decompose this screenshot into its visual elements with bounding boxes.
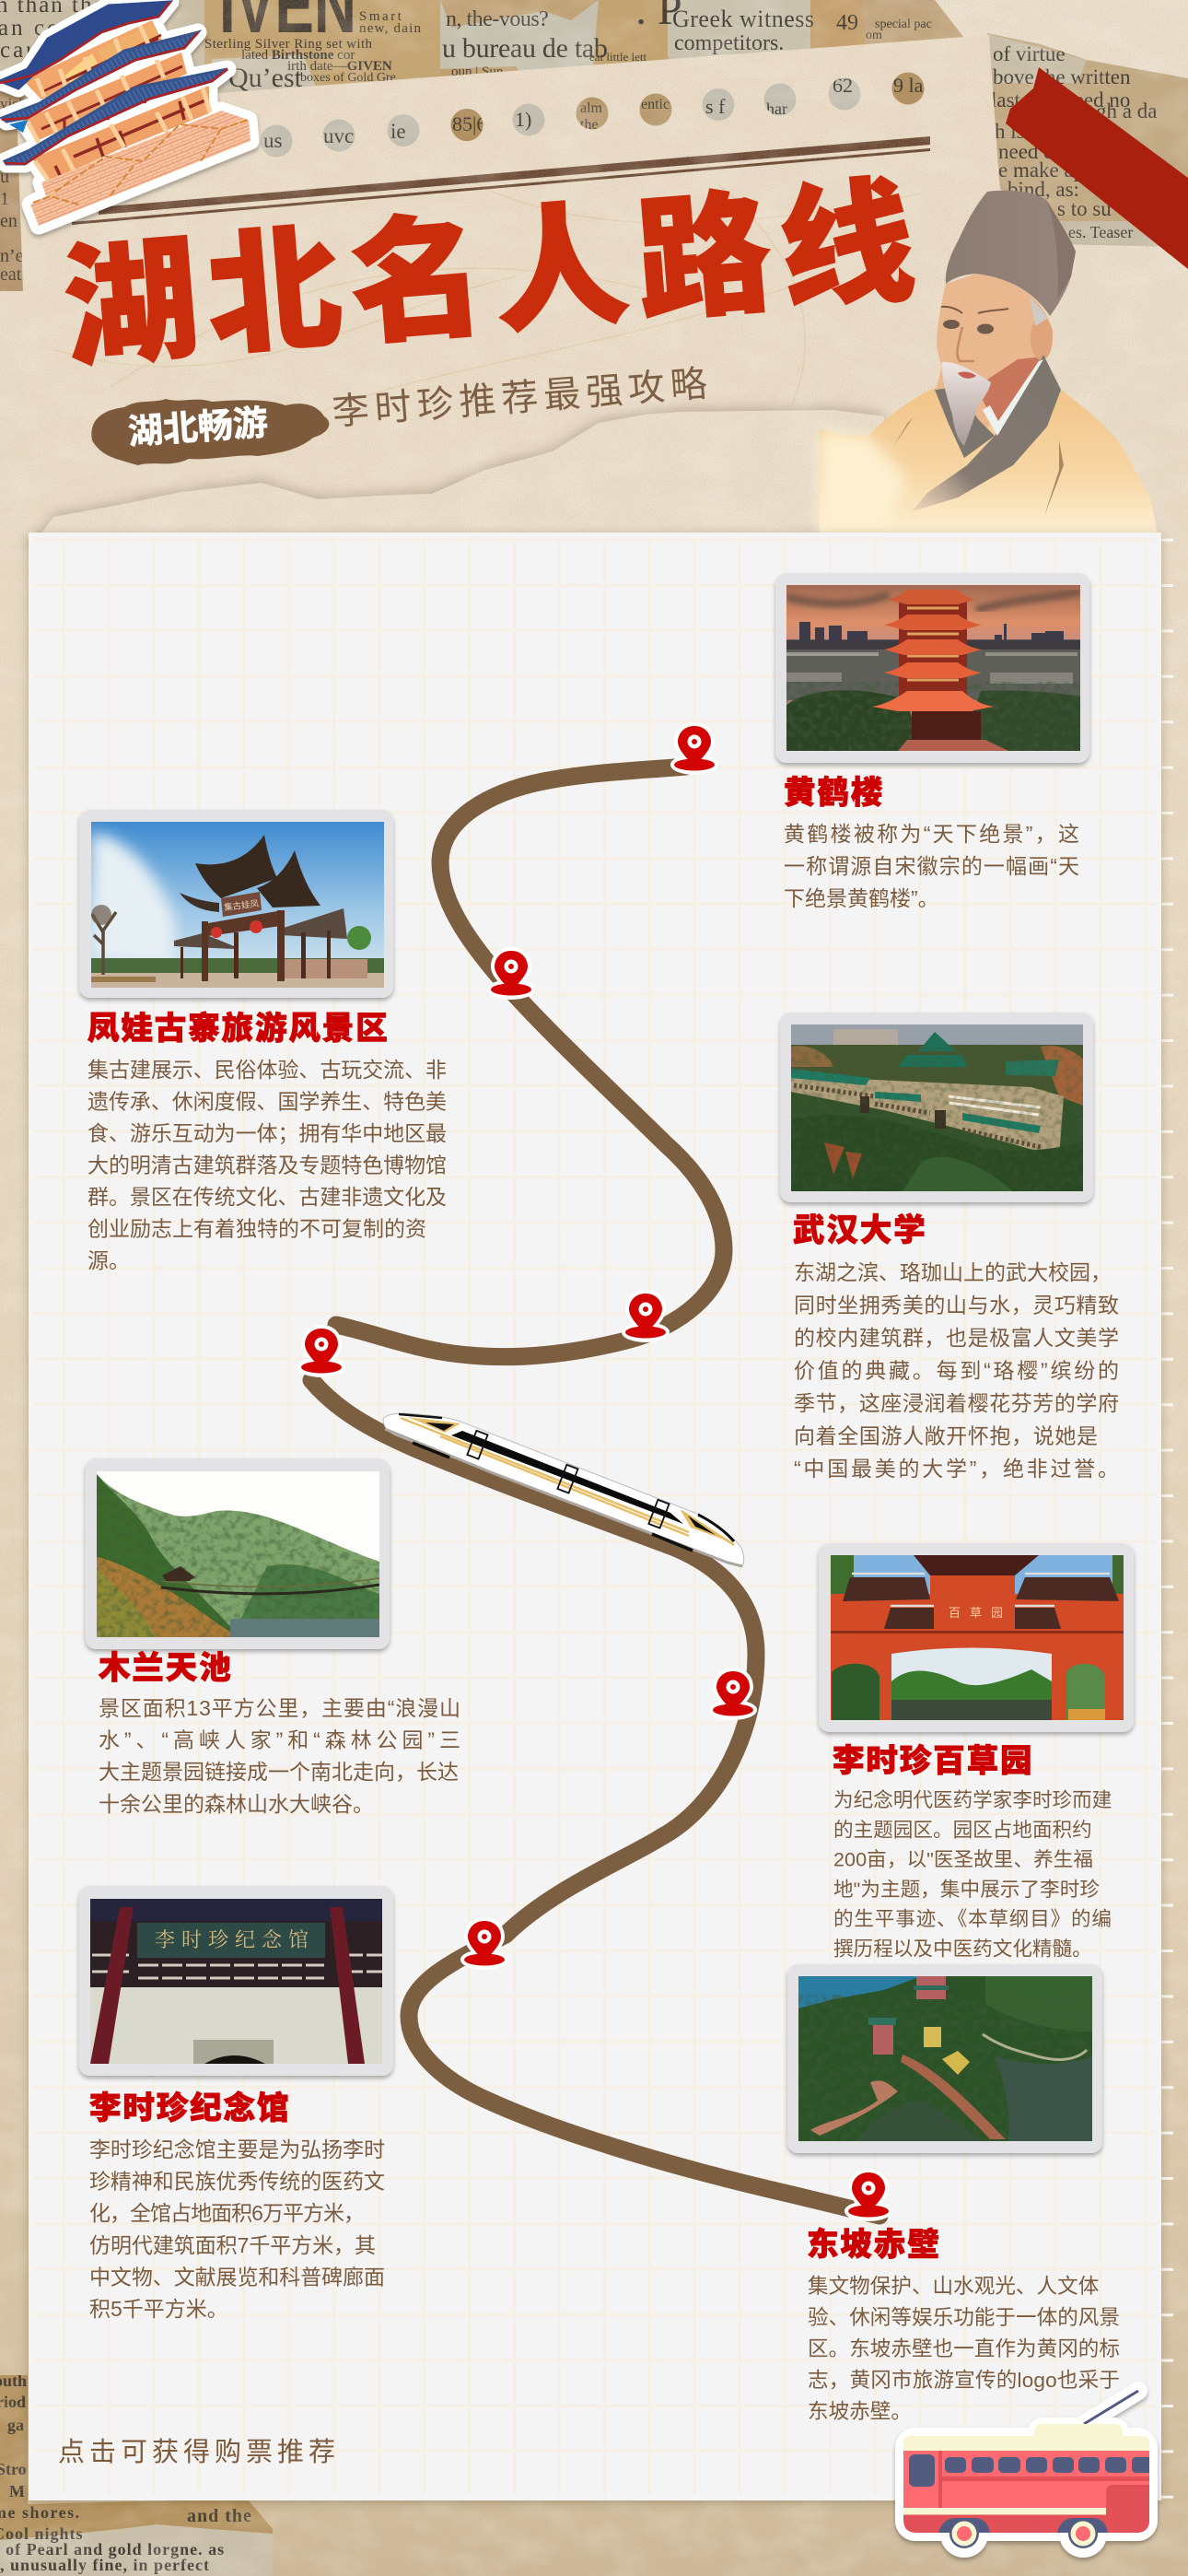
- description: [99, 1696, 460, 1816]
- tram sticker: [895, 2391, 1158, 2558]
- description: 源。: [87, 1248, 130, 1272]
- punched holes row: s f: [705, 95, 726, 118]
- photo: Mulan lake: [85, 1458, 390, 1649]
- newspaper clippings: top band: new, dain: [359, 21, 422, 36]
- punched holes row: uvc: [323, 124, 354, 147]
- newspaper clipping: bottom left: M: [9, 2482, 25, 2500]
- newspaper clippings: top band: [0, 0, 963, 100]
- heading: 凤娃古寨旅游风景区: [87, 1011, 390, 1047]
- description: 仿明代建筑面积7千平方米，其: [89, 2233, 376, 2257]
- card: 武汉大学: [780, 1013, 1119, 1481]
- description: 区。东坡赤壁也一直作为黄冈的标: [808, 2337, 1120, 2360]
- newspaper clipping: right: gh a da: [1096, 100, 1157, 123]
- newspaper clippings: top band: lated Birthstone cor: [241, 48, 355, 63]
- description: [833, 1788, 1112, 1961]
- newspaper clipping: right: of virtue: [993, 42, 1066, 65]
- description: 珍精神和民族优秀传统的医药文: [89, 2170, 385, 2194]
- newspaper clipping: left strip: u: [0, 167, 9, 187]
- description: 化，全馆占地面积6万平方米，: [89, 2201, 365, 2225]
- description: 价值的典藏。每到“珞樱”缤纷的: [794, 1358, 1119, 1382]
- description: “中国最美的大学”，绝非过誉。: [794, 1457, 1119, 1481]
- newspaper clipping: right: bind, as:: [1007, 178, 1079, 201]
- newspaper clipping: left strip: en: [0, 211, 17, 231]
- newspaper clippings: top band: competitors.: [674, 31, 784, 55]
- pin 5: [709, 1668, 757, 1720]
- photo: Dongpo Red Cliff: [787, 1964, 1102, 2153]
- description: 撰历程以及中医药文化精髓。: [833, 1937, 1092, 1961]
- description: 创业励志上有着独特的不可复制的资: [87, 1216, 426, 1240]
- newspaper clipping: bottom left: and the: [187, 2506, 252, 2526]
- description: 李时珍纪念馆主要是为弘扬李时: [89, 2137, 385, 2161]
- description: 一称谓源自宋徽宗的一幅画“天: [784, 854, 1079, 878]
- description: 的生平事迹、《本草纲目》的编: [833, 1907, 1112, 1930]
- newspaper clippings: top band: cau: [0, 38, 41, 63]
- torn lower paper edge: [28, 410, 884, 553]
- title: 湖北名人路线: [58, 166, 929, 384]
- description: [89, 2137, 385, 2321]
- newspaper clippings: top band: special pac: [875, 18, 932, 31]
- photo: Baicao garden gate: 百草园: [949, 1606, 1012, 1620]
- newspaper clippings: top band: eat little lett: [589, 50, 646, 64]
- newspaper clipping: bottom left: ga: [7, 2416, 24, 2434]
- newspaper clipping: left strip: 1: [0, 189, 9, 209]
- newspaper clipping: bottom left: [0, 2371, 273, 2576]
- newspaper clippings: top band: n, the-vous?: [446, 7, 548, 31]
- newspaper clipping: right: bove the written: [993, 65, 1131, 88]
- newspaper clippings: top band: boxes of Gold Gre: [300, 71, 396, 85]
- description: [87, 1058, 447, 1272]
- description: 黄鹤楼被称为“天下绝景”，这: [784, 822, 1079, 846]
- tag: 湖北畅游: [91, 399, 329, 465]
- red ribbon: [1006, 67, 1188, 269]
- subtitle: 李时珍推荐最强攻略: [331, 363, 714, 433]
- punched holes row: entic: [641, 97, 670, 112]
- description: 同时坐拥秀美的山与水，灵巧精致: [794, 1294, 1119, 1317]
- newspaper clipping: right: es. Teaser: [1068, 223, 1133, 241]
- description: 为纪念明代医药学家李时珍而建: [833, 1788, 1112, 1811]
- newspaper clippings: top band: Greek witness: [672, 6, 815, 32]
- description: 东坡赤壁。: [808, 2400, 912, 2423]
- heading: 木兰天池: [99, 1651, 233, 1686]
- newspaper clipping: right: s to su: [1057, 197, 1112, 220]
- punched holes row: 1): [515, 108, 531, 131]
- punched holes row: har: [766, 100, 787, 118]
- torn paper sheet: [0, 35, 1004, 516]
- description: 食、游乐互动为一体；拥有华中地区最: [87, 1121, 447, 1145]
- description: 景区面积13平方公里，主要由“浪漫山: [99, 1696, 460, 1720]
- description: 中文物、文献展览和科普碑廊面: [89, 2265, 385, 2289]
- newspaper clippings: top band: an co: [0, 16, 61, 41]
- card: 东坡赤壁: [787, 1964, 1120, 2423]
- description: 集古建展示、民俗体验、古玩交流、非: [87, 1058, 447, 1082]
- description: 200亩，以"医圣故里、养生福: [833, 1848, 1093, 1871]
- punched holes row: 85|6: [452, 112, 486, 135]
- newspaper clippings: top band: Sterling Silver Ring set with: [204, 37, 373, 52]
- heading: 李时珍纪念馆: [89, 2090, 290, 2126]
- punched holes row: ie: [390, 120, 406, 143]
- description: 群。景区在传统文化、古建非遗文化及: [87, 1185, 447, 1209]
- punched holes row: the: [580, 117, 599, 133]
- description: [784, 822, 1079, 910]
- card: 李时珍百草园: [819, 1543, 1134, 1961]
- description: 大主题景园链接成一个南北走向，长达: [99, 1760, 459, 1784]
- photo: Yellow Crane Tower: [775, 573, 1089, 763]
- photo: Fengwa gate: [79, 810, 393, 998]
- punched holes row: [260, 72, 925, 157]
- route line: [311, 767, 879, 2216]
- high-speed train: [383, 1413, 744, 1566]
- description: 验、休闲等娱乐功能于一体的风景: [808, 2306, 1120, 2329]
- newspaper clippings: top band: 49: [836, 11, 858, 35]
- newspaper clippings: top band: irth date—GIVEN: [287, 59, 392, 74]
- newspaper clipping: left strip: visi: [0, 95, 23, 112]
- heading: 武汉大学: [793, 1213, 927, 1248]
- description: 志，黄冈市旅游宣传的logo也采于: [808, 2369, 1120, 2392]
- description: 十余公里的森林山水大峡谷。: [99, 1792, 374, 1816]
- pin 7: [844, 2169, 892, 2221]
- photo: memorial hall: [79, 1886, 393, 2076]
- tag: 湖北畅游: 湖北畅游: [127, 404, 269, 452]
- description: 大的明清古建筑群落及专题特色博物馆: [87, 1153, 447, 1177]
- description: 遗传承、休闲度假、国学养生、特色美: [87, 1089, 447, 1113]
- description: 东湖之滨、珞珈山上的武大校园，: [794, 1260, 1112, 1284]
- heading: 李时珍百草园: [833, 1744, 1033, 1779]
- punched holes row: us: [263, 129, 282, 152]
- card: 木兰天池: [85, 1458, 460, 1816]
- description: 的校内建筑群，也是极富人文美学: [794, 1326, 1119, 1350]
- punched holes row: alm: [580, 100, 603, 116]
- description: 向着全国游人敞开怀抱，说她是: [794, 1424, 1098, 1448]
- card: 李时珍纪念馆: [79, 1886, 393, 2321]
- photo: Wuhan University: [780, 1013, 1093, 1202]
- newspaper clipping: left strip: eat: [0, 264, 22, 285]
- newspaper clipping: right: e make ap: [998, 158, 1084, 181]
- punched holes row: 9 la: [893, 74, 924, 97]
- newspaper clipping: right: need d at t: [998, 140, 1087, 163]
- newspaper clippings: top band: om: [866, 29, 882, 42]
- heading: 东坡赤壁: [807, 2228, 941, 2263]
- portrait: Li Shizhen: [820, 191, 1158, 535]
- newspaper clippings: top band: oun | Sun: [451, 64, 504, 79]
- description: 季节，这座浸润着樱花芬芳的学府: [794, 1391, 1119, 1415]
- card: 黄鹤楼: [775, 573, 1089, 910]
- main content panel: [29, 533, 1173, 2500]
- newspaper clipping: left strip: n’e: [0, 246, 24, 266]
- photo: memorial hall: 李时珍纪念馆: [155, 1925, 315, 1953]
- description: 地"为主题，集中展示了李时珍: [833, 1878, 1100, 1901]
- newspaper clippings: top band: Qu’est: [228, 63, 303, 93]
- description: 积5千平方米。: [89, 2297, 228, 2321]
- newspaper clipping: left strip: [0, 92, 24, 293]
- double rule lines: [72, 136, 930, 225]
- pagoda sticker: [0, 2, 250, 226]
- pin 6: [460, 1917, 508, 1970]
- pin 1: [670, 722, 718, 775]
- pin 4: [297, 1325, 345, 1377]
- footer call to action: 点击可获得购票推荐: [58, 2437, 340, 2467]
- pin 2: [487, 947, 535, 1000]
- heading: 黄鹤楼: [784, 776, 884, 811]
- punched holes row: 62: [833, 74, 853, 97]
- photo: Fengwa gate: 集古娃凤: [224, 898, 260, 913]
- pin 3: [622, 1290, 670, 1342]
- photo: Baicao garden gate: [819, 1543, 1134, 1732]
- description: [794, 1260, 1119, 1481]
- newspaper clippings: top band: u bureau de tab: [442, 33, 608, 64]
- newspaper clippings: top band: Smart: [359, 9, 403, 24]
- newspaper clipping: right: [976, 28, 1188, 249]
- description: 水”、“高峡人家”和“森林公园”三: [99, 1728, 460, 1752]
- newspaper clipping: right: last tinn need no: [991, 88, 1130, 111]
- newspaper clipping: right: h is speci: [995, 120, 1074, 143]
- card: 凤娃古寨旅游风景区: [79, 810, 447, 1272]
- description: 集文物保护、山水观光、人文体: [808, 2275, 1099, 2298]
- description: [808, 2275, 1120, 2423]
- description: 的主题园区。园区占地面积约: [833, 1818, 1092, 1841]
- description: 下绝景黄鹤楼”。: [784, 886, 939, 910]
